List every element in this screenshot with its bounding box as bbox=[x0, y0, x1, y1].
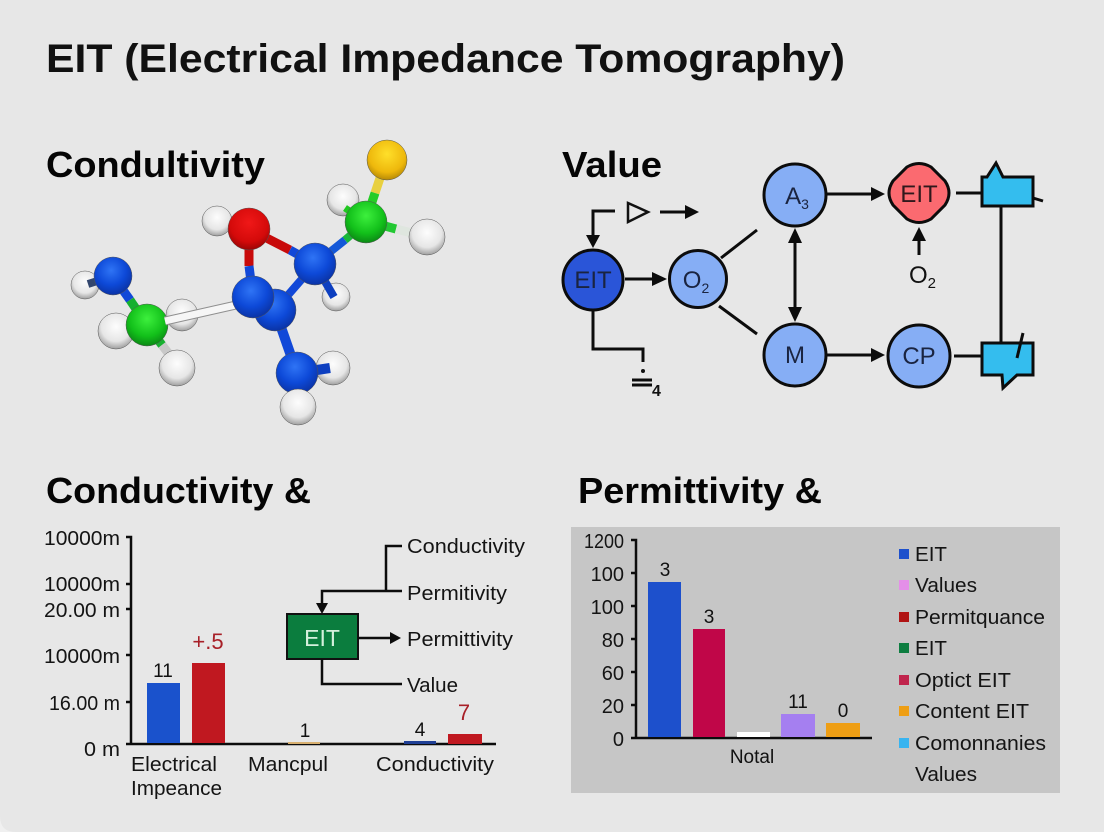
panel: value flow diagram bbox=[562, 144, 1043, 400]
icon: bottom callout bbox=[982, 333, 1033, 388]
panel: molecule bbox=[46, 140, 445, 425]
y axis labels: 10000m bbox=[44, 574, 120, 596]
connector: ground from EIT bbox=[593, 311, 661, 400]
arrow: M to CP bbox=[827, 348, 885, 362]
y axis labels: 0 bbox=[613, 729, 624, 751]
y axis labels: 0 m bbox=[84, 739, 120, 761]
bar value labels: 11 bbox=[788, 692, 808, 713]
legend bbox=[899, 544, 1046, 786]
legend: Comonnanies bbox=[915, 733, 1046, 755]
heading: conductivity: Conductivity & bbox=[46, 470, 311, 511]
node: O2: 2 bbox=[701, 280, 709, 296]
icon: top callout bbox=[982, 163, 1043, 206]
y axis labels: 16.00 m bbox=[49, 693, 120, 715]
bar value labels: 4 bbox=[415, 720, 426, 741]
y axis labels: 60 bbox=[602, 663, 624, 685]
arrow: top right bbox=[660, 205, 699, 219]
icon: triangle marker bbox=[628, 203, 648, 222]
bar value labels bbox=[660, 560, 848, 722]
legend: EIT bbox=[915, 544, 947, 566]
bars bbox=[147, 663, 482, 744]
heading: value: Value bbox=[562, 144, 662, 185]
label: O2: O bbox=[909, 262, 928, 289]
x axis labels: Conductivity bbox=[376, 754, 494, 776]
node: A3: A bbox=[785, 183, 801, 210]
connector: O2 to A3 bbox=[721, 230, 757, 258]
y axis labels: 1200 bbox=[584, 531, 624, 553]
bar value labels: 3 bbox=[704, 607, 714, 628]
node: A3: 3 bbox=[801, 196, 809, 212]
flow inset: Conductivity bbox=[407, 536, 525, 558]
y axis labels: 100 bbox=[591, 564, 624, 586]
connector: callouts bbox=[954, 193, 1001, 356]
flow inset: Permittivity bbox=[407, 629, 513, 651]
y axis labels: 20 bbox=[602, 696, 624, 718]
node: EIT dark bbox=[563, 250, 623, 310]
node: A3 bbox=[764, 164, 826, 226]
x axis labels: Mancpul bbox=[248, 754, 328, 776]
y axis labels: 80 bbox=[602, 630, 624, 652]
x axis labels: Electrical bbox=[131, 754, 217, 776]
bars bbox=[648, 582, 860, 737]
bar value labels: 1 bbox=[300, 721, 310, 742]
flow inset: Value bbox=[407, 675, 458, 697]
flow inset bbox=[287, 536, 525, 697]
node: CP: CP bbox=[902, 343, 936, 370]
legend: Values bbox=[915, 575, 977, 597]
molecule model bbox=[71, 140, 445, 425]
bar chart axes bbox=[126, 537, 496, 744]
node: EIT diamond: EIT bbox=[900, 181, 938, 208]
EIT box bbox=[287, 614, 358, 659]
legend: EIT bbox=[915, 638, 947, 660]
bar value labels: +.5 bbox=[192, 629, 224, 654]
bar value labels: 7 bbox=[458, 700, 470, 725]
node: O2: O bbox=[683, 267, 701, 294]
title: EIT (Electrical Impedance Tomography) bbox=[46, 37, 845, 81]
node: CP bbox=[888, 325, 950, 387]
bar value labels bbox=[153, 629, 470, 742]
y axis labels: 10000m bbox=[44, 646, 120, 668]
connector: feedback into EIT bbox=[586, 211, 615, 248]
arrow: O2 to EIT bbox=[912, 227, 926, 255]
connector: O2 to M bbox=[719, 306, 757, 334]
x axis label: Notal bbox=[730, 747, 774, 768]
label: O2: 2 bbox=[928, 275, 936, 292]
legend: Permitquance bbox=[915, 607, 1045, 629]
node: M bbox=[764, 324, 826, 386]
node: M: M bbox=[785, 342, 805, 369]
flow inset: Permitivity bbox=[407, 583, 507, 605]
legend: Content EIT bbox=[915, 701, 1029, 723]
arrow: A3 and M bbox=[788, 228, 802, 322]
panel: conductivity chart bbox=[44, 470, 525, 800]
heading: permittivity: Permittivity & bbox=[578, 470, 822, 511]
chart background bbox=[571, 527, 1060, 793]
node: EIT diamond bbox=[889, 164, 949, 222]
connector: ground from EIT: 4 bbox=[652, 383, 661, 400]
bar chart axes bbox=[631, 540, 872, 738]
arrow: EIT to O2 bbox=[625, 272, 667, 286]
y axis labels: 10000m bbox=[44, 528, 120, 550]
legend: Optict EIT bbox=[915, 670, 1011, 692]
heading: condultivity: Condultivity bbox=[46, 144, 265, 185]
bar value labels: 3 bbox=[660, 560, 670, 581]
bar value labels: 11 bbox=[153, 661, 173, 682]
panel: permittivity chart bbox=[571, 470, 1060, 793]
y axis labels bbox=[44, 528, 120, 761]
y axis labels: 100 bbox=[591, 597, 624, 619]
EIT box: EIT bbox=[304, 625, 340, 651]
bar value labels: 0 bbox=[838, 701, 848, 722]
node: O2 bbox=[670, 250, 726, 308]
x axis labels bbox=[131, 754, 494, 800]
y axis labels: 20.00 m bbox=[44, 600, 120, 622]
y axis labels bbox=[584, 531, 624, 751]
legend: Values bbox=[915, 764, 977, 786]
x axis labels: Impeance bbox=[131, 778, 222, 800]
arrow: A3 to EIT bbox=[827, 187, 885, 201]
node: EIT dark: EIT bbox=[574, 267, 612, 294]
